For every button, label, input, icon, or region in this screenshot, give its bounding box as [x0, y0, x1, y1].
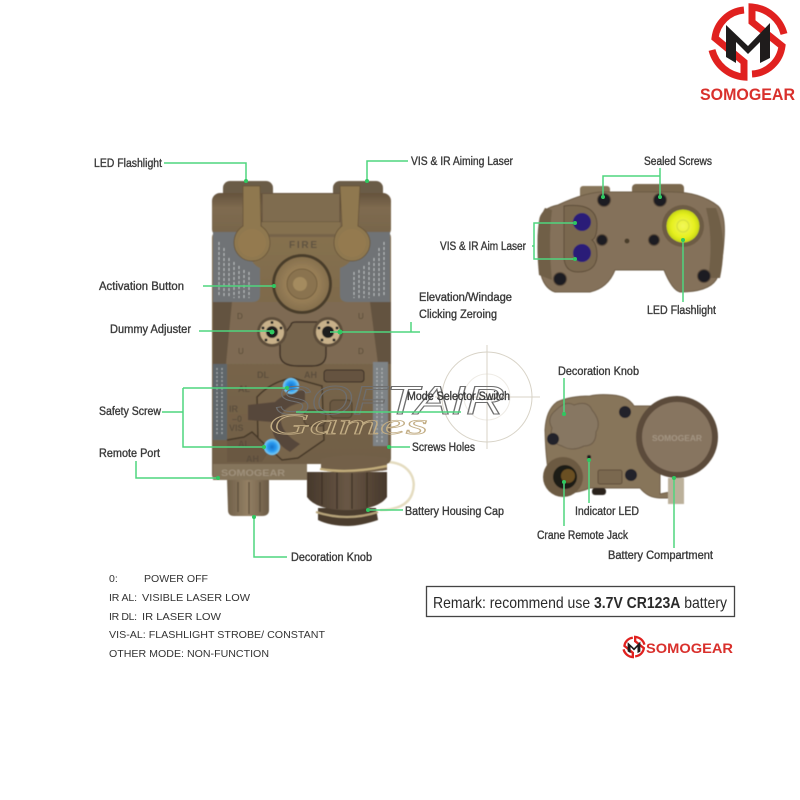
- mode legend: IR AL:: [109, 592, 137, 604]
- FIRE label: FIRE: [289, 240, 317, 251]
- callout labels: LED Flashlight: [647, 305, 717, 317]
- callout labels: [94, 156, 717, 564]
- mode legend: 0:: [109, 573, 118, 585]
- callout labels: Safety Screw: [99, 406, 162, 418]
- screws: [554, 194, 710, 286]
- callout labels: Indicator LED: [575, 506, 639, 518]
- callout labels: VIS & IR Aiming Laser: [411, 156, 513, 168]
- callout labels: Remote Port: [99, 448, 161, 460]
- callout labels: Mode Selector Switch: [407, 391, 510, 403]
- top bumps: [580, 186, 610, 200]
- callout labels: Activation Button: [99, 281, 184, 293]
- front adjuster markings: U: [238, 347, 244, 356]
- mode legend: POWER OFF: [144, 573, 208, 585]
- warning plates: [213, 232, 390, 302]
- VIS laser lens: [573, 213, 591, 231]
- laser aperture housing: [564, 205, 597, 272]
- front markings: IR: [229, 404, 239, 414]
- front markings: VIS: [229, 423, 244, 433]
- lower left dark band: [227, 432, 270, 462]
- battery compartment cap: SOMOGEAR: [652, 434, 702, 443]
- front markings: AL: [238, 439, 250, 449]
- callout labels: Screws Holes: [412, 442, 475, 454]
- main device front view: [212, 181, 414, 526]
- front markings: DL: [257, 370, 269, 380]
- remark box: [426, 586, 734, 616]
- LED lens: [662, 205, 704, 247]
- remark box: Remark: recommend use 3.7V CR123A battery: [433, 595, 727, 612]
- front markings: AH: [246, 454, 259, 464]
- brand plate: [213, 464, 307, 480]
- logo: SOMOGEAR top right: [700, 7, 795, 104]
- mode legend: OTHER MODE: NON-FUNCTION: [109, 648, 269, 660]
- callout labels: Decoration Knob: [558, 366, 639, 378]
- logo: SOMOGEAR small: [624, 637, 733, 657]
- Games wordmark: Games: [268, 408, 428, 441]
- mode legend: IR DL:: [109, 611, 137, 623]
- loop cord: [380, 462, 414, 510]
- front markings: AH: [304, 370, 317, 380]
- mode legend: VISIBLE LASER LOW: [142, 592, 250, 604]
- crosshair circle: [435, 345, 540, 449]
- callout labels: Elevation/Windage: [419, 292, 512, 304]
- mode selector switch: [248, 378, 324, 460]
- logo wordmark: SOMOGEAR: [700, 86, 795, 104]
- callout labels: Dummy Adjuster: [110, 324, 191, 336]
- IR laser lens: [573, 244, 591, 262]
- mode legend: IR LASER LOW: [142, 611, 221, 623]
- callout labels: Crane Remote Jack: [537, 530, 628, 542]
- mode legend: [109, 573, 326, 660]
- front adjuster markings: D: [237, 312, 243, 321]
- housing: [545, 395, 680, 498]
- elevation windage adjuster: [313, 317, 343, 347]
- decoration knob: [227, 478, 269, 516]
- screws: [547, 433, 559, 445]
- brand plate: SOMOGEAR: [221, 468, 285, 479]
- top-right view of device: muzzle end: [537, 184, 724, 292]
- notch: [598, 470, 622, 484]
- knob ridges: [238, 482, 260, 514]
- crane remote jack: [543, 457, 583, 497]
- battery compartment cap: [636, 396, 718, 478]
- bottom-right view of device: rear end: [543, 395, 718, 504]
- indicator LED: [587, 455, 591, 459]
- logo S marks: [712, 7, 784, 77]
- front adjuster markings: U: [358, 312, 364, 321]
- decoration knob: [550, 403, 598, 449]
- front markings: AL: [238, 384, 250, 394]
- dummy adjuster: [257, 317, 287, 347]
- callout labels: Battery Compartment: [608, 550, 714, 562]
- callout labels: Clicking Zeroing: [419, 309, 497, 321]
- Softair wordmark: SOFTAIR: [275, 379, 505, 423]
- front adjuster markings: D: [358, 347, 364, 356]
- callout labels: Battery Housing Cap: [405, 506, 504, 518]
- housing: [538, 192, 724, 292]
- activation button: [272, 254, 332, 314]
- top ears: [223, 181, 273, 201]
- small wordmark: SOMOGEAR: [646, 640, 733, 656]
- latch: [668, 478, 684, 504]
- lower body frame: [213, 302, 391, 364]
- callout labels: LED Flashlight: [94, 158, 163, 170]
- center recess: [280, 322, 326, 366]
- callout labels: Sealed Screws: [644, 156, 712, 168]
- front markings: –0: [232, 414, 242, 424]
- body: [212, 232, 391, 480]
- mode legend: VIS-AL: FLASHLIGHT STROBE/ CONSTANT: [109, 629, 326, 641]
- top band: [212, 193, 391, 237]
- battery housing cap: [307, 455, 387, 526]
- lower recess slots: [324, 370, 364, 382]
- left and right straps: [234, 186, 370, 261]
- callout lines and dots: [136, 161, 685, 557]
- callout labels: Decoration Knob: [291, 552, 372, 564]
- callout labels: VIS & IR Aim Laser: [440, 241, 526, 253]
- logo M mark: [726, 23, 770, 63]
- lower side plates: [213, 364, 227, 440]
- watermark: Softair Games: [268, 345, 540, 449]
- small logo mark: [624, 637, 644, 657]
- side straps: [537, 208, 552, 280]
